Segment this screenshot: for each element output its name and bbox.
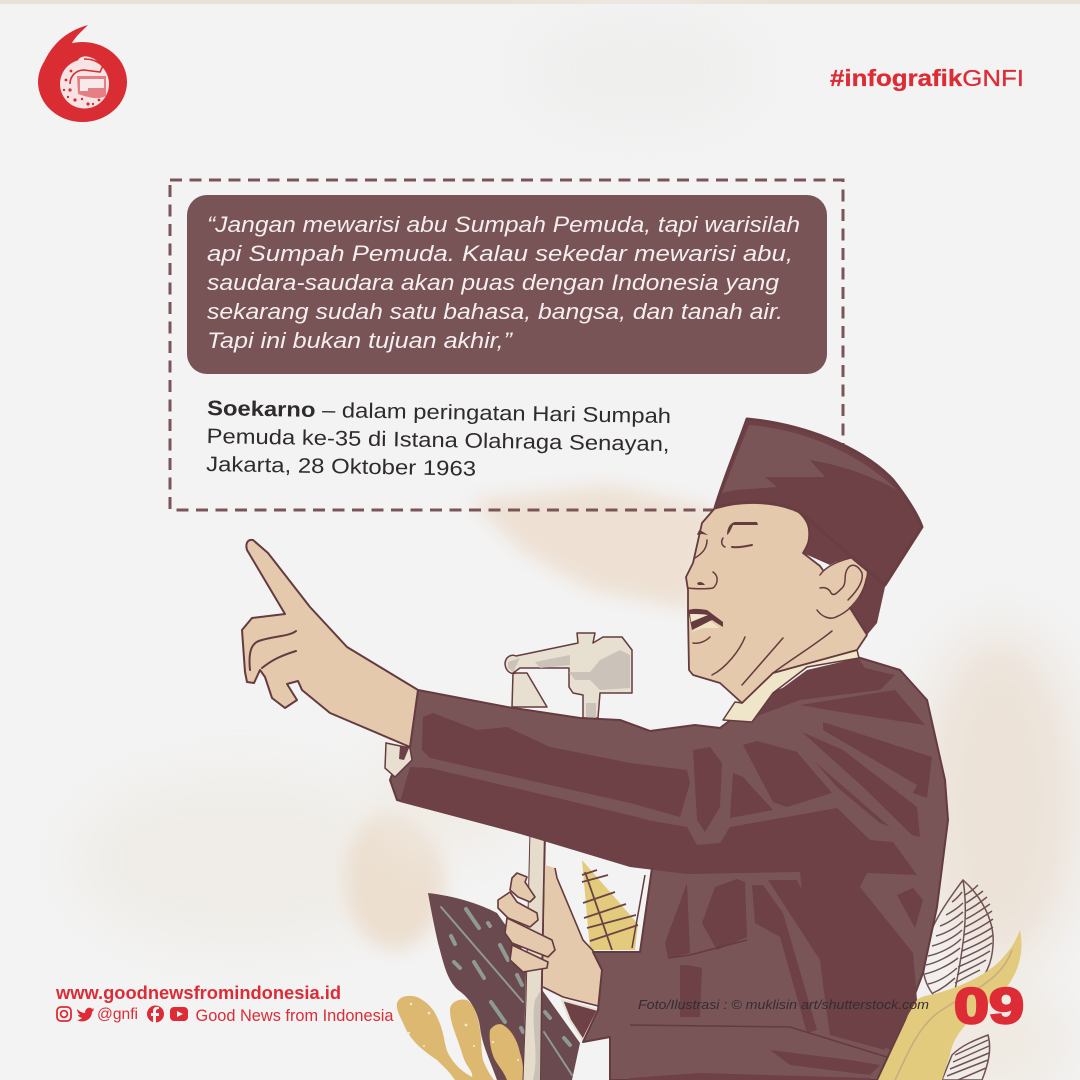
hashtag heading: #infografik GNFI	[830, 65, 1024, 91]
quote panel: “Jangan mewarisi abu Sumpah Pemuda, tapi warisilah	[207, 212, 800, 237]
hat	[715, 419, 922, 585]
decorative yellow triangle leaf	[582, 860, 638, 950]
quote panel: sekarang sudah satu bahasa, bangsa, dan tanah air.	[207, 299, 783, 324]
quote panel: saudara-saudara akan puas dengan Indonesia yang	[207, 270, 780, 295]
upper sleeve shadow	[422, 713, 690, 817]
attribution text: Pemuda ke-35 di Istana Olahraga Senayan,	[206, 425, 670, 456]
icon: twitter	[77, 1008, 94, 1021]
website and social links: www.goodnewsfromindonesia.id	[55, 982, 341, 1003]
logo GNFI	[38, 25, 127, 122]
quote panel	[187, 195, 827, 374]
page number: 09	[954, 978, 1024, 1034]
decorative dark leaf	[428, 893, 580, 1080]
quote panel: Tapi ini bukan tujuan akhir,”	[207, 328, 514, 353]
attribution text: Jakarta, 28 Oktober 1963	[206, 453, 476, 481]
jacket	[390, 657, 948, 1080]
face	[686, 500, 867, 703]
icon: youtube	[170, 1007, 188, 1021]
microphone	[505, 633, 632, 1080]
ear	[818, 557, 867, 617]
dashed frame	[170, 180, 843, 510]
decorative yellow leaf	[874, 930, 1021, 1080]
shirt cuff	[385, 743, 412, 777]
quote panel: api Sumpah Pemuda. Kalau sekedar mewarisi abu,	[207, 241, 793, 266]
decorative tan plant	[397, 996, 523, 1080]
eyebrow, nose and mouth	[697, 522, 758, 585]
icon: instagram	[57, 1007, 71, 1021]
icon: facebook	[147, 1006, 164, 1023]
figure: Soekarno	[242, 419, 948, 1080]
left hand holding microphone	[498, 865, 602, 1040]
decorative line leaf	[923, 880, 993, 1080]
website and social links: @gnfi	[97, 1006, 138, 1023]
website and social links	[55, 982, 394, 1025]
right hand pointing	[242, 540, 418, 747]
attribution text: Soekarno – dalam peringatan Hari Sumpah	[207, 397, 671, 428]
hair	[800, 510, 885, 635]
website and social links: Good News from Indonesia	[196, 1006, 394, 1025]
jacket shadows	[630, 658, 932, 1080]
attribution text	[206, 397, 671, 484]
lower sleeve shadow	[400, 767, 917, 1050]
photo credit: Foto/Ilustrasi : © muklisin art/shutterstock.com	[638, 997, 929, 1012]
collar	[723, 650, 859, 722]
